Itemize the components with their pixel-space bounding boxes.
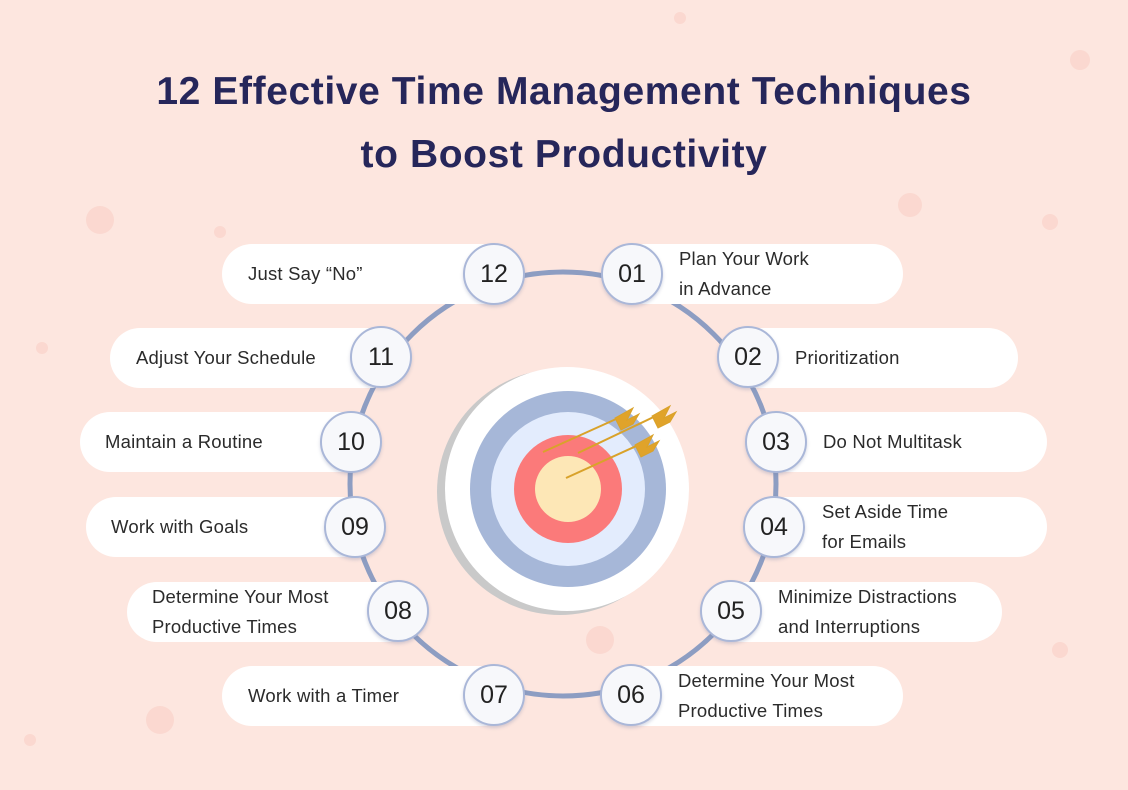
number 04: 04 xyxy=(760,512,788,540)
number 01: 01 xyxy=(618,260,646,288)
pill 12 xyxy=(222,244,512,304)
number 01 xyxy=(601,243,663,305)
pill 05: and Interruptions xyxy=(778,616,920,637)
target with arrows xyxy=(437,367,689,615)
number 12 xyxy=(463,243,525,305)
arrows xyxy=(543,406,676,478)
pill 01: in Advance xyxy=(679,278,772,299)
number 06 xyxy=(600,664,662,726)
pill 10: Maintain a Routine xyxy=(105,431,263,452)
pill 05 xyxy=(713,582,1002,642)
number 08: 08 xyxy=(384,596,412,624)
pill 04 xyxy=(756,497,1047,557)
number 07: 07 xyxy=(480,680,508,708)
title: to Boost Productivity xyxy=(361,133,767,176)
pill 01 xyxy=(614,244,903,304)
pill 08: Determine Your Most xyxy=(152,586,329,607)
pill 07: Work with a Timer xyxy=(248,685,399,706)
pill 04: Set Aside Time xyxy=(822,501,948,522)
number 02 xyxy=(717,326,779,388)
number 06: 06 xyxy=(617,680,645,708)
pill 09 xyxy=(86,497,376,557)
number 04 xyxy=(743,496,805,558)
pill 08 xyxy=(127,582,417,642)
pill 02: Prioritization xyxy=(795,347,900,368)
pill 10 xyxy=(80,412,370,472)
number 08 xyxy=(367,580,429,642)
pill 07 xyxy=(222,666,512,726)
number 09 xyxy=(324,496,386,558)
pill 03 xyxy=(758,412,1047,472)
pill 03: Do Not Multitask xyxy=(823,431,962,452)
number 10 xyxy=(320,411,382,473)
number 05: 05 xyxy=(717,596,745,624)
number 07 xyxy=(463,664,525,726)
pill 04: for Emails xyxy=(822,531,906,552)
number 03 xyxy=(745,411,807,473)
pill 06 xyxy=(613,666,903,726)
pill 01: Plan Your Work xyxy=(679,248,809,269)
title: 12 Effective Time Management Techniques xyxy=(156,70,972,113)
pill 08: Productive Times xyxy=(152,616,297,637)
pill 09: Work with Goals xyxy=(111,516,248,537)
number 03: 03 xyxy=(762,428,790,456)
pill 12: Just Say “No” xyxy=(248,263,363,284)
pill 06: Determine Your Most xyxy=(678,670,855,691)
number 09: 09 xyxy=(341,512,369,540)
pill 05: Minimize Distractions xyxy=(778,586,957,607)
number 10: 10 xyxy=(337,428,365,456)
pill 11 xyxy=(110,328,400,388)
number 02: 02 xyxy=(734,342,762,370)
pill 02 xyxy=(730,328,1018,388)
pill 11: Adjust Your Schedule xyxy=(136,347,316,368)
number 11: 11 xyxy=(368,342,394,370)
number 05 xyxy=(700,580,762,642)
number 11 xyxy=(350,326,412,388)
pill 06: Productive Times xyxy=(678,700,823,721)
number 12: 12 xyxy=(480,260,508,288)
title xyxy=(156,70,972,176)
